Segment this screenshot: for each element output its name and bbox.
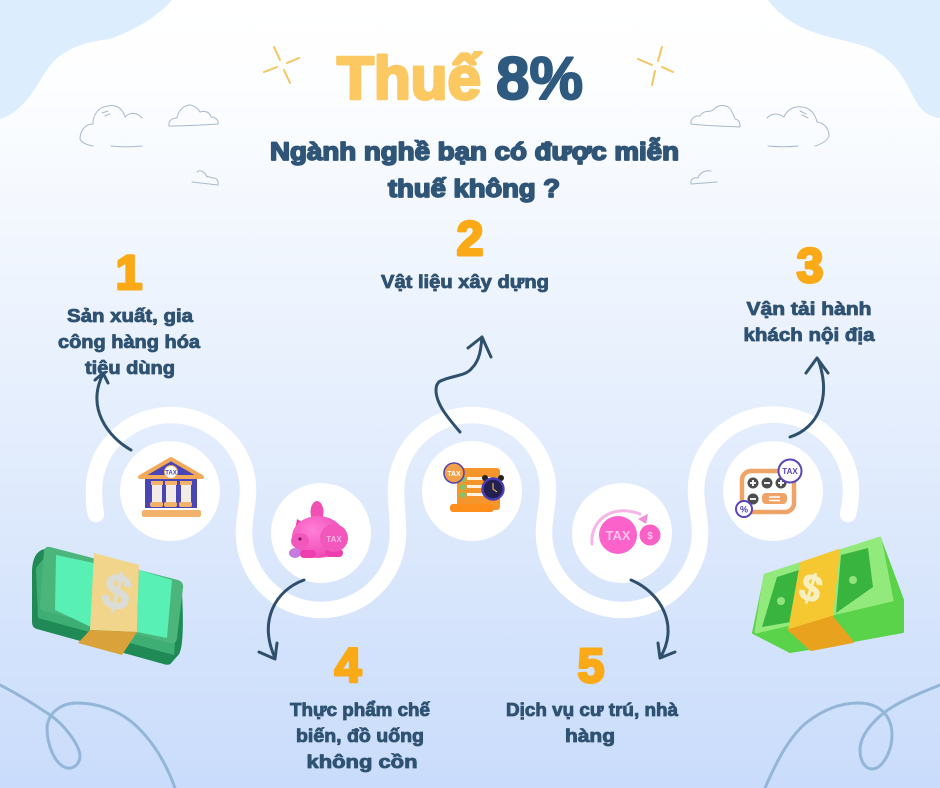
- number 1 and label: tiêu dùng: [85, 358, 175, 378]
- arrow to item 1: [95, 373, 131, 450]
- icon: tax calculator: %: [740, 504, 748, 514]
- sparkle right: [638, 47, 673, 85]
- number 5 and label: hàng: [565, 726, 615, 746]
- number 2 and label: Vật liệu xây dựng: [381, 272, 549, 292]
- decorative corner blob left: [0, 0, 172, 119]
- money stack left: $: [97, 561, 137, 623]
- subtitle: [270, 136, 679, 203]
- decorative curl left: [0, 685, 175, 788]
- decorative curl right: [765, 685, 940, 788]
- number 4 and label: không cồn: [306, 752, 418, 772]
- number 3 and label: khách nội địa: [744, 325, 876, 345]
- number 5 and label: 5: [578, 640, 604, 693]
- icon: tax coin with arrow: TAX: [605, 528, 631, 543]
- number 1 and label: 1: [116, 247, 142, 300]
- white wavy path: [94, 415, 851, 610]
- number 3 and label: Vận tải hành: [746, 299, 872, 319]
- decorative corner blob right: [768, 0, 940, 118]
- title: [337, 45, 583, 112]
- money stack right: [753, 538, 903, 652]
- number 4 and label: Thực phẩm chế: [290, 700, 431, 720]
- arrow to item 2: [436, 337, 491, 432]
- icon: tax scroll with clock: [444, 463, 504, 512]
- number 1 and label: công hàng hóa: [58, 332, 201, 352]
- sparkle left: [264, 47, 299, 83]
- icon: tax bank: [140, 459, 202, 517]
- title: Thuế: [337, 45, 482, 112]
- icon: tax scroll with clock: TAX: [447, 471, 461, 478]
- subtitle: Ngành nghề bạn có được miễn: [270, 136, 679, 166]
- number 3 and label: [744, 240, 876, 345]
- icon: tax bank: TAX: [165, 470, 177, 476]
- number 1 and label: Sản xuất, gia: [67, 306, 194, 326]
- money stack left: [33, 547, 183, 664]
- number 1 and label: [58, 247, 201, 378]
- arrow to item 3: [790, 358, 828, 437]
- icon: tax coin with arrow: [592, 511, 660, 554]
- money stack right: $: [794, 566, 827, 612]
- number 2 and label: [381, 213, 549, 292]
- icon: piggy bank: [289, 501, 348, 558]
- number 2 and label: 2: [457, 213, 483, 266]
- number 5 and label: [506, 640, 679, 746]
- arrow to item 5: [631, 580, 675, 658]
- clouds: [80, 105, 829, 185]
- number 5 and label: Dịch vụ cư trú, nhà: [506, 700, 679, 720]
- icon: tax calculator: [736, 460, 802, 517]
- icon: piggy bank: TAX: [326, 535, 342, 544]
- icon circle backgrounds: [120, 441, 823, 583]
- icon: tax calculator: TAX: [782, 467, 798, 476]
- subtitle: thuế không ?: [388, 175, 560, 203]
- icon: tax coin with arrow: $: [647, 531, 653, 542]
- number 4 and label: biến, đồ uống: [296, 726, 424, 746]
- title: 8%: [496, 45, 583, 112]
- number 4 and label: [290, 640, 431, 772]
- arrow to item 4: [259, 580, 304, 659]
- number 4 and label: 4: [335, 640, 362, 693]
- number 3 and label: 3: [797, 240, 823, 293]
